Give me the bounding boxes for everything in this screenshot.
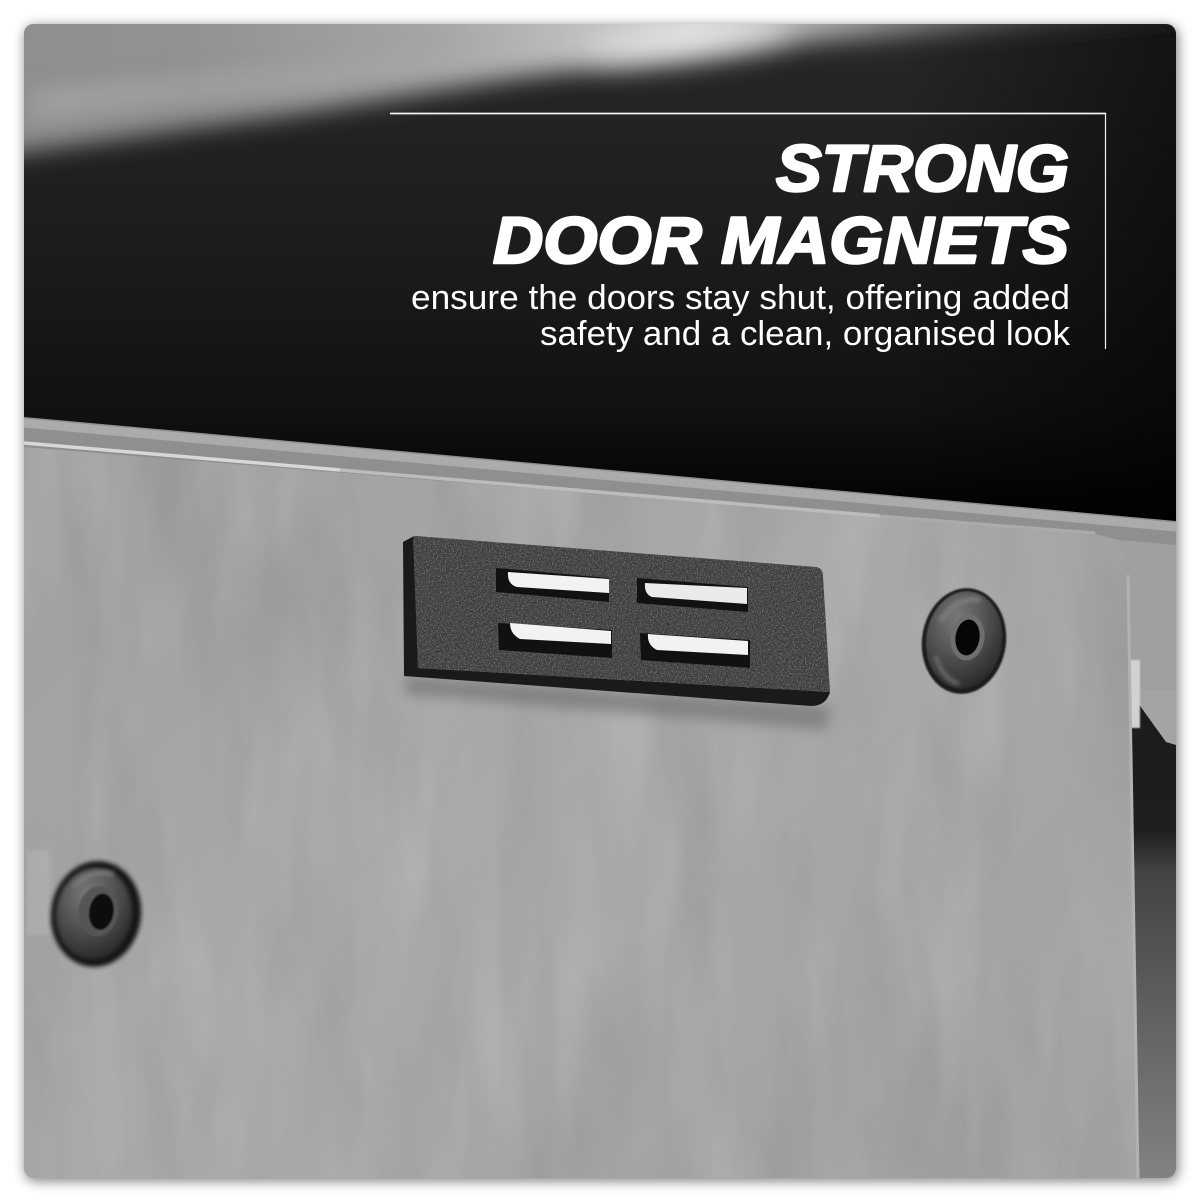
plate face — [413, 536, 830, 692]
magnet slot 4 — [640, 633, 750, 668]
door top ridge — [24, 417, 1176, 545]
description text — [411, 279, 1071, 353]
callout frame — [390, 113, 1106, 349]
blurred grey background band — [24, 24, 1144, 168]
description text: ensure the doors stay shut, offering added — [411, 279, 1070, 317]
magnet slot 1 — [496, 568, 609, 602]
left rivet — [48, 858, 144, 970]
heading: DOOR MAGNETS — [493, 203, 1069, 277]
side frame with notch — [1110, 518, 1176, 1178]
heading — [493, 131, 1069, 277]
door panel — [24, 440, 1140, 1178]
magnetic catch plate — [403, 534, 832, 730]
description text: safety and a clean, organised look — [540, 315, 1071, 353]
magnet slot 3 — [498, 623, 612, 658]
heading: STRONG — [776, 131, 1069, 205]
plate side edge — [403, 536, 830, 706]
right rivet — [920, 587, 1008, 695]
plate contact shadow — [404, 676, 832, 730]
black cabinet interior — [24, 24, 1176, 544]
magnet slot 2 — [637, 578, 748, 612]
